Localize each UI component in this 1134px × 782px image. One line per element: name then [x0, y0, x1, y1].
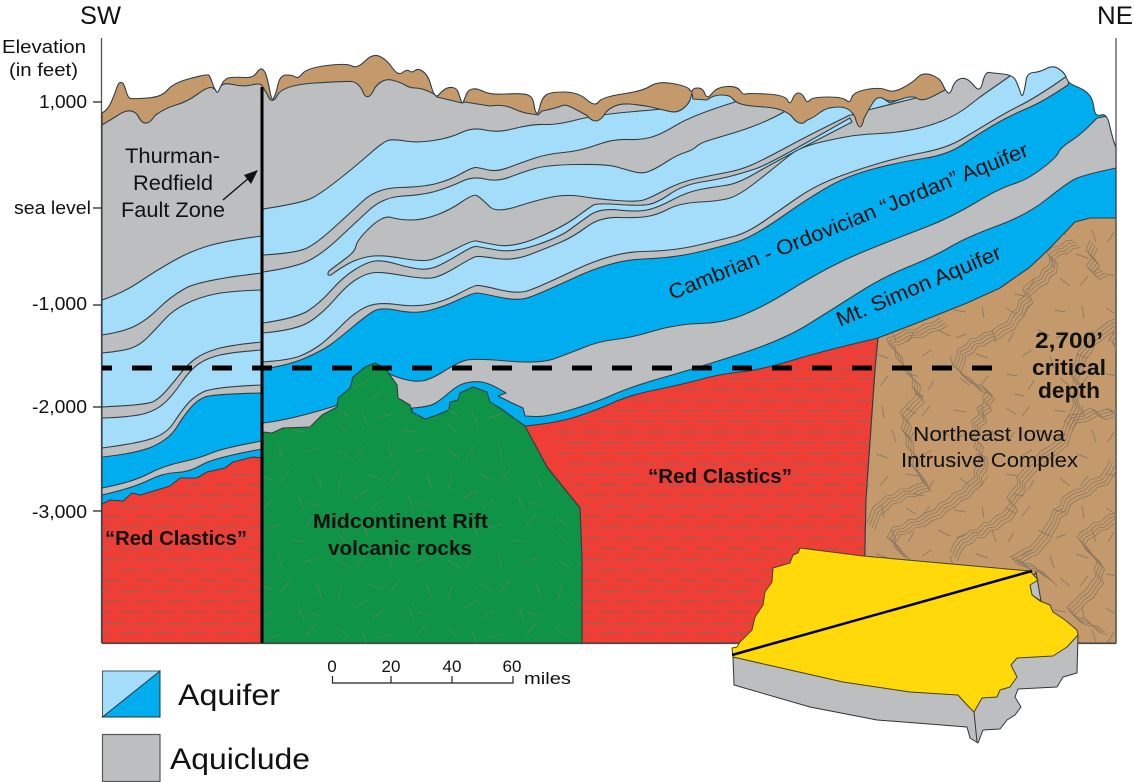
Mt. Simon aquifer label: Mt. Simon Aquifer	[833, 241, 1005, 332]
east block lower light aquifer	[263, 60, 1067, 362]
elevation axis labels: Elevation	[2, 37, 86, 57]
legend: aquifer	[102, 671, 280, 717]
geologic cross section	[102, 30, 1124, 643]
fault zone label: Fault Zone	[121, 199, 225, 222]
fault zone label	[121, 145, 225, 222]
land surface outline	[102, 55, 1116, 643]
fault zone label: Redfield	[133, 172, 213, 195]
fault line	[260, 87, 264, 643]
Iowa locator map	[732, 548, 1078, 743]
scale bar: 20	[382, 657, 400, 676]
scale bar: 40	[443, 657, 461, 676]
axis frame lines	[93, 38, 1116, 643]
transect line	[732, 571, 1032, 655]
red clastics west label: “Red Clastics”	[105, 528, 247, 550]
east block upper aquifer	[263, 80, 740, 255]
legend: aquiclude	[102, 734, 310, 782]
Mt. Simon aquifer band	[412, 168, 1116, 440]
elevation axis labels: (in feet)	[9, 60, 78, 80]
intrusive complex label	[901, 424, 1078, 472]
direction label SW: SW	[80, 2, 121, 30]
legend: aquifer: Aquifer	[178, 679, 280, 712]
critical depth dashed line	[102, 366, 995, 370]
state side wall	[733, 635, 1078, 743]
arrow to fault	[223, 170, 258, 200]
scale bar	[327, 657, 571, 688]
volcanic rocks label	[313, 511, 488, 560]
intrusive complex label: Intrusive Complex	[901, 450, 1078, 472]
critical depth label: depth	[1038, 378, 1100, 403]
red clastics east label: “Red Clastics”	[648, 466, 792, 488]
elevation axis labels: -2,000	[32, 397, 87, 417]
elevation axis labels	[2, 37, 91, 522]
legend: aquiclude: Aquiclude	[170, 743, 310, 776]
red clastics west	[102, 457, 262, 643]
volcanic rocks label: volcanic rocks	[328, 538, 472, 560]
Jordan aquifer band	[263, 60, 1108, 423]
elevation axis labels: -1,000	[32, 294, 87, 314]
west block aquifers	[102, 236, 262, 520]
red clastics east	[525, 338, 878, 643]
aquiclude background layer	[102, 55, 1116, 643]
elevation axis labels: sea level	[14, 198, 91, 218]
surface soil layer	[102, 56, 946, 128]
midcontinent rift volcanic rocks	[263, 363, 582, 643]
elevation axis labels: 1,000	[39, 92, 87, 112]
scale bar: 60	[503, 657, 521, 676]
critical depth label	[1032, 328, 1106, 403]
state top face	[732, 548, 1078, 712]
critical depth label: critical	[1032, 355, 1106, 380]
scale bar: 0	[327, 657, 337, 676]
small light aquifer patch under surface	[868, 95, 916, 110]
bottom edge of section	[102, 642, 1116, 644]
east block middle aquifer with shale lens	[263, 105, 853, 323]
intrusive complex label: Northeast Iowa	[913, 424, 1066, 446]
northeast Iowa intrusive complex	[863, 218, 1124, 643]
critical depth label: 2,700’	[1035, 328, 1103, 353]
direction label NE: NE	[1097, 2, 1133, 30]
east block aquifer bands	[102, 30, 1116, 440]
fault zone label: Thurman-	[125, 145, 220, 168]
volcanic rocks label: Midcontinent Rift	[313, 511, 488, 533]
Jordan aquifer label: Cambrian - Ordovician “Jordan” Aquifer	[665, 139, 1032, 305]
elevation axis labels: -3,000	[32, 502, 87, 522]
scale bar: miles	[524, 669, 571, 688]
